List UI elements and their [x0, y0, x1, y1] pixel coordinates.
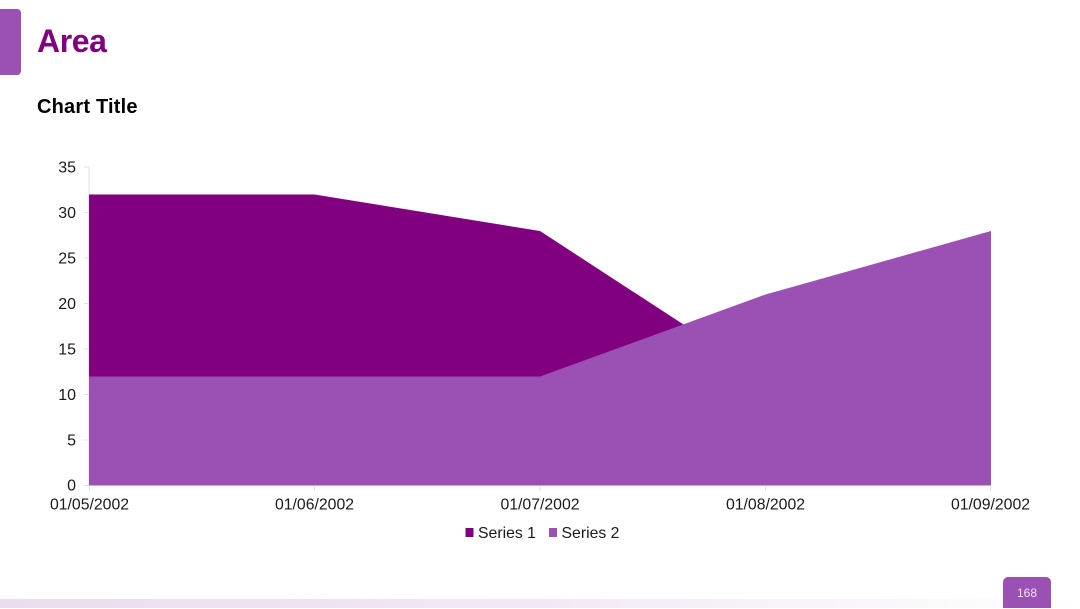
x axis labels — [50, 496, 1030, 514]
y axis — [84, 167, 990, 491]
x axis labels: 01/05/2002 — [50, 496, 129, 514]
y axis labels: 25 — [58, 250, 76, 268]
footer gradient band — [0, 599, 1080, 608]
x axis labels: 01/06/2002 — [275, 496, 354, 514]
y axis labels: 5 — [67, 432, 76, 450]
legend: Series 1 — [478, 525, 536, 542]
page number badge — [1003, 577, 1051, 608]
legend — [466, 525, 619, 542]
y axis labels: 0 — [67, 478, 76, 494]
y axis labels — [58, 160, 76, 494]
x axis labels: 01/08/2002 — [726, 496, 805, 514]
title: Area — [37, 23, 107, 59]
y axis labels: 15 — [58, 342, 76, 358]
chart title: Chart Title — [37, 96, 138, 118]
x axis labels: 01/07/2002 — [500, 496, 580, 514]
y axis labels: 30 — [58, 205, 76, 222]
x axis labels: 01/09/2002 — [951, 496, 1030, 514]
page number badge: 168 — [1017, 586, 1037, 600]
series 2 area — [89, 231, 991, 486]
header accent tab — [0, 9, 21, 75]
legend: Series 2 — [562, 525, 619, 542]
series 1 area — [89, 194, 991, 486]
y axis labels: 10 — [58, 387, 76, 404]
y axis labels: 20 — [58, 296, 76, 313]
y axis labels: 35 — [58, 160, 76, 176]
